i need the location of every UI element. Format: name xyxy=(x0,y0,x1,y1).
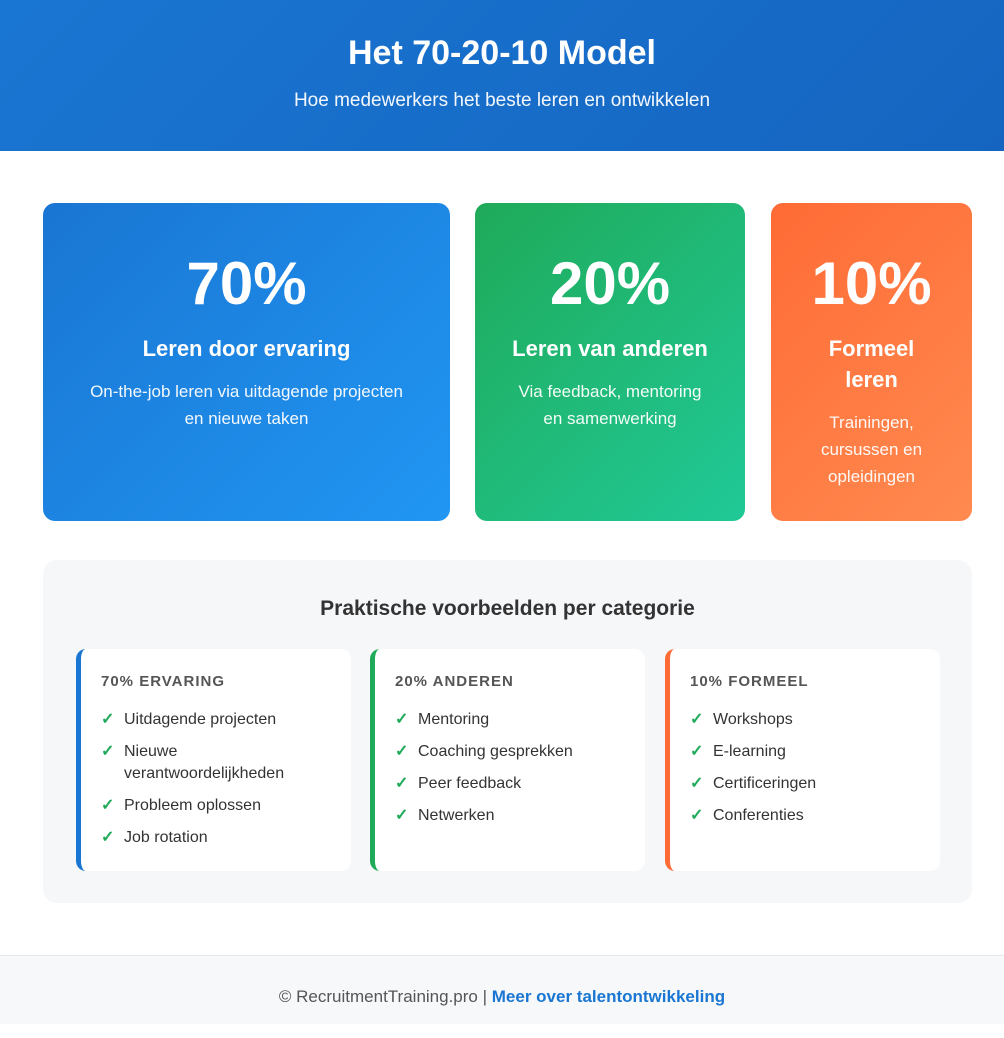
card: 20% xyxy=(475,203,745,521)
header xyxy=(0,0,1004,151)
footer: © RecruitmentTraining.pro | Meer over talentontwikkeling xyxy=(279,987,725,1006)
subtitle: Hoe medewerkers het beste leren en ontwikkelen xyxy=(294,90,710,111)
card: 10% xyxy=(771,203,972,521)
card: 20%: Via feedback, mentoring xyxy=(518,382,702,401)
footer xyxy=(0,955,1004,1024)
card: 70%: en nieuwe taken xyxy=(185,409,308,428)
example: ervaring: verantwoordelijkheden xyxy=(124,765,284,782)
example: anderen: Mentoring xyxy=(418,711,489,728)
card: 10%: Formeel xyxy=(829,336,914,361)
card: 70%: 70% xyxy=(186,250,307,317)
title: Het 70-20-10 Model xyxy=(348,34,656,72)
example: ervaring xyxy=(76,649,351,871)
example: ervaring: Nieuwe xyxy=(124,743,177,760)
example: formeel: Conferenties xyxy=(713,807,804,824)
card: 10%: opleidingen xyxy=(828,467,915,486)
card: 70%: Leren door ervaring xyxy=(143,336,350,361)
card: 10%: 10% xyxy=(811,250,932,317)
example: formeel: Workshops xyxy=(713,711,793,728)
section heading: Praktische voorbeelden per categorie xyxy=(320,597,695,620)
panel: examples xyxy=(43,560,972,903)
example: formeel: E-learning xyxy=(713,743,786,760)
card: 10%: cursussen en xyxy=(821,440,922,459)
example: formeel: 10% FORMEEL xyxy=(690,673,809,690)
card: 70%: On-the-job leren via uitdagende projecten xyxy=(90,382,403,401)
card: 20%: 20% xyxy=(550,250,670,317)
example: anderen: Peer feedback xyxy=(418,775,521,792)
example: ervaring: 70% ERVARING xyxy=(101,673,225,690)
card: 10%: leren xyxy=(845,367,898,392)
example: ervaring: Probleem oplossen xyxy=(124,797,261,814)
card: 10%: Trainingen, xyxy=(829,413,914,432)
example: ervaring: Job rotation xyxy=(124,829,208,846)
example: anderen: Coaching gesprekken xyxy=(418,743,573,760)
example: ervaring: Uitdagende projecten xyxy=(124,711,276,728)
example: anderen xyxy=(370,649,645,871)
card: 20%: en samenwerking xyxy=(543,409,677,428)
card: 70% xyxy=(43,203,450,521)
card: 20%: Leren van anderen xyxy=(512,336,708,361)
example: anderen: 20% ANDEREN xyxy=(395,673,514,690)
example: anderen: Netwerken xyxy=(418,807,494,824)
example: formeel: Certificeringen xyxy=(713,775,816,792)
example: formeel xyxy=(665,649,940,871)
